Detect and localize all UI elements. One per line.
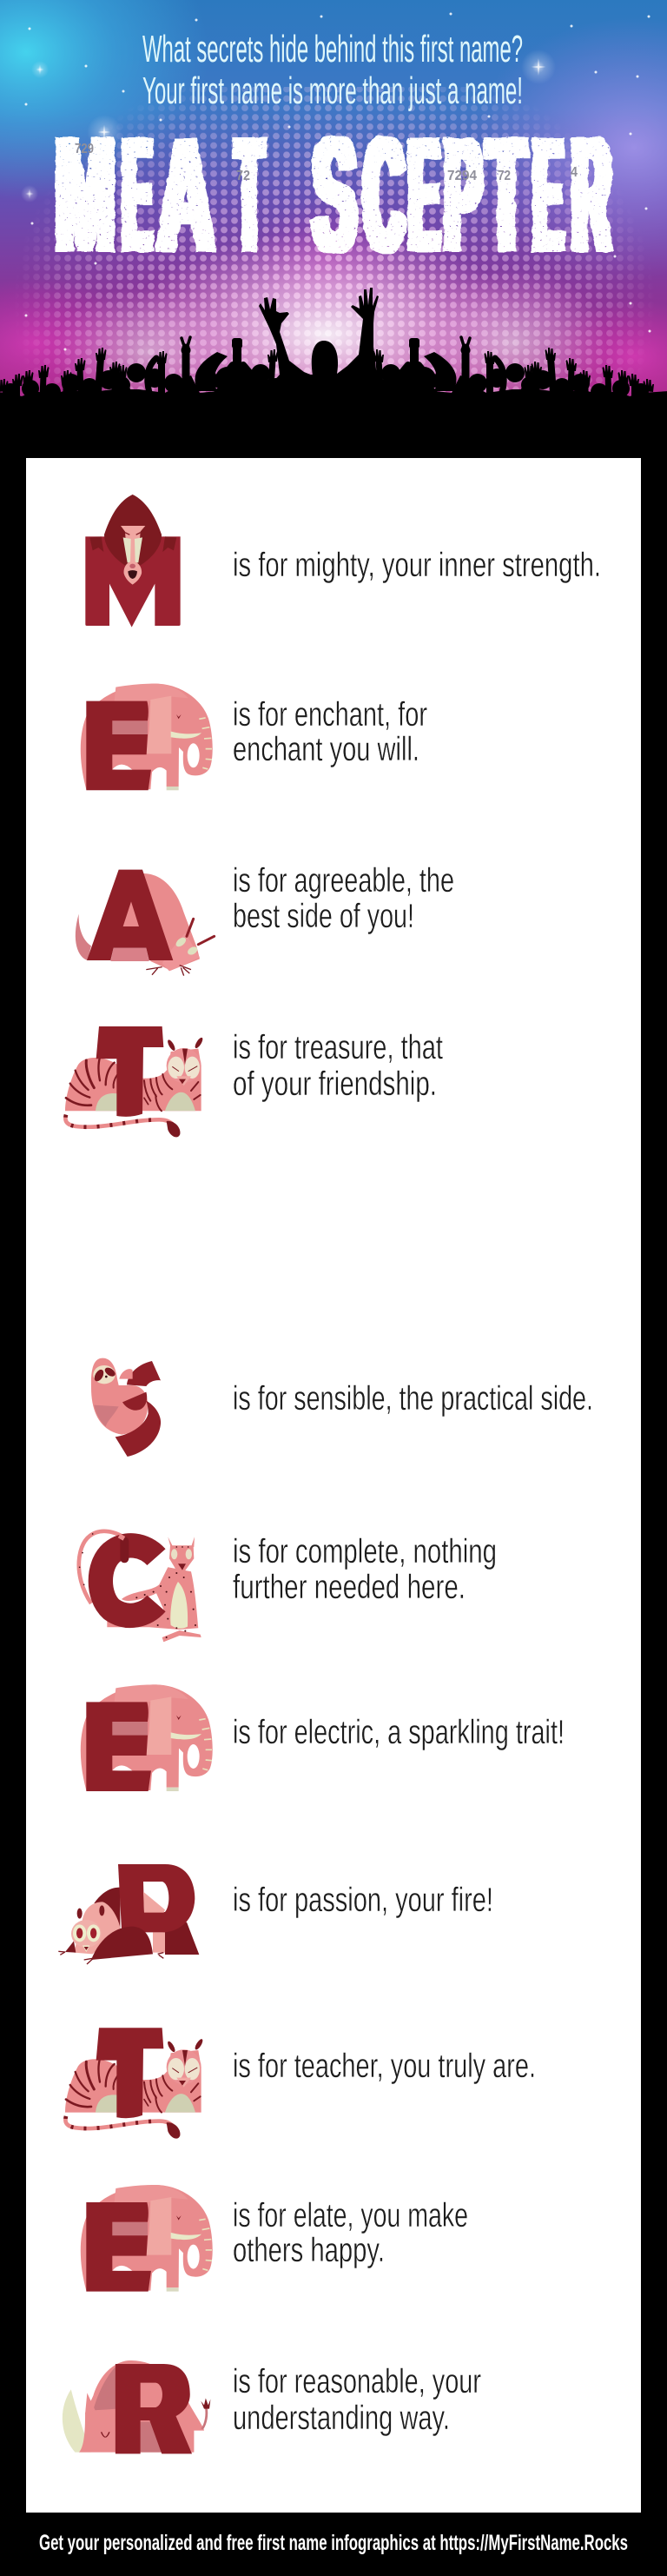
title: MEAT SCEPTER: C bbox=[364, 105, 404, 285]
text: is for agreeable, the bbox=[233, 862, 454, 900]
icon: rhino letter R bbox=[63, 2360, 210, 2453]
text: is for reasonable, your bbox=[233, 2363, 481, 2400]
title: MEAT SCEPTER: A bbox=[158, 105, 214, 285]
header question lines bbox=[142, 28, 523, 112]
title: MEAT SCEPTER: 729 bbox=[75, 142, 94, 156]
text: of your friendship. bbox=[233, 1066, 437, 1103]
title: MEAT SCEPTER: E bbox=[409, 105, 439, 285]
title: MEAT SCEPTER: S bbox=[313, 105, 356, 285]
title: MEAT SCEPTER: 4 bbox=[571, 165, 578, 180]
title: MEAT SCEPTER: T bbox=[224, 105, 262, 285]
crowd silhouette bbox=[0, 288, 667, 461]
title: MEAT SCEPTER: E bbox=[123, 105, 151, 285]
text: is for elate, you make bbox=[233, 2197, 468, 2234]
title: MEAT SCEPTER: 72 bbox=[236, 169, 250, 183]
row: T is for treasure bbox=[65, 1026, 443, 1137]
text: enchant you will. bbox=[233, 731, 419, 768]
text bbox=[233, 862, 454, 935]
icon: baboon letter M bbox=[85, 495, 181, 627]
row: E is for elate bbox=[81, 2185, 468, 2292]
text: is for passion, your fire! bbox=[233, 1882, 493, 1919]
row: A is for agreeable bbox=[76, 862, 454, 976]
text: further needed here. bbox=[233, 1569, 466, 1606]
title: MEAT SCEPTER: M bbox=[56, 105, 115, 285]
row: C is for complete bbox=[79, 1531, 497, 1642]
title: MEAT SCEPTER: 7294 bbox=[447, 169, 477, 183]
row: T is for teacher bbox=[65, 2028, 536, 2139]
row: E is for enchant bbox=[81, 684, 427, 790]
icon: possum letter P bbox=[58, 1864, 199, 1964]
icon: elephant letter E bbox=[81, 2185, 213, 2292]
white content panel bbox=[26, 458, 641, 2513]
text: understanding way. bbox=[233, 2400, 450, 2437]
title: MEAT SCEPTER bbox=[56, 105, 611, 285]
header banner: concert background bbox=[0, 0, 667, 439]
text: is for teacher, you truly are. bbox=[233, 2048, 536, 2085]
row: P is for passion bbox=[58, 1864, 493, 1964]
text: best side of you! bbox=[233, 898, 414, 935]
row: E is for electric bbox=[81, 1684, 565, 1791]
title: MEAT SCEPTER: P bbox=[445, 105, 481, 285]
icon: armadillo letter A bbox=[76, 870, 215, 976]
icon: elephant letter E bbox=[81, 1684, 213, 1791]
icon: elephant letter E bbox=[81, 684, 213, 790]
text: is for enchant, for bbox=[233, 696, 427, 734]
icon: leopard letter C bbox=[79, 1531, 201, 1642]
text: is for treasure, that bbox=[233, 1029, 443, 1066]
title: MEAT SCEPTER: E bbox=[534, 105, 562, 285]
icon: sloth letter S bbox=[91, 1358, 161, 1457]
text bbox=[233, 2197, 468, 2269]
title: MEAT SCEPTER: T bbox=[487, 105, 525, 285]
row: R is for reasonable bbox=[63, 2360, 481, 2453]
text bbox=[233, 696, 427, 768]
text bbox=[233, 1029, 443, 1103]
icon: tiger letter T bbox=[65, 1026, 204, 1137]
row: S is for sensible bbox=[91, 1358, 593, 1457]
title: MEAT SCEPTER: 72 bbox=[498, 169, 511, 183]
row: M is for mighty bbox=[85, 495, 601, 627]
text: others happy. bbox=[233, 2232, 385, 2269]
text: is for complete, nothing bbox=[233, 1533, 497, 1570]
icon: tiger letter T bbox=[65, 2028, 204, 2139]
text bbox=[233, 2363, 481, 2437]
text bbox=[233, 1533, 497, 1606]
